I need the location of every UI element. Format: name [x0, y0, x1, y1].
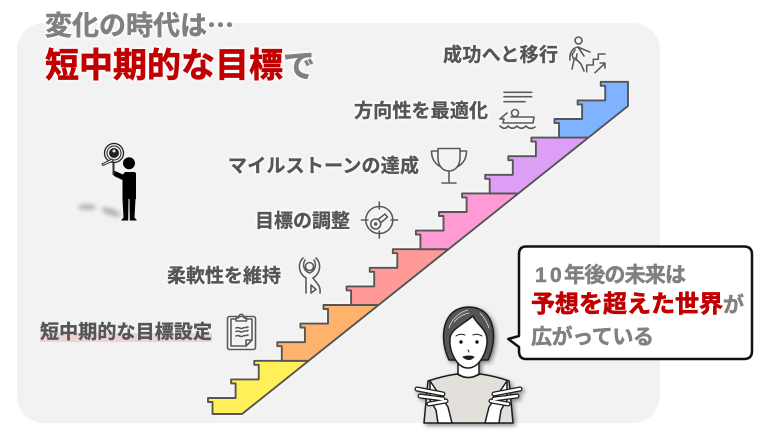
- icon: flexible person: [299, 258, 320, 293]
- staircase: [208, 82, 628, 414]
- stairs: purple: [485, 138, 588, 193]
- label: 方向性を最適化: 方向性を最適化: [354, 99, 488, 122]
- left hand: [417, 381, 452, 423]
- bubble line 1: 年後の未来は: [564, 264, 686, 287]
- neck: [458, 362, 479, 378]
- label: 短中期的な目標設定: 短中期的な目標設定: [40, 321, 212, 343]
- icon: trophy: [432, 148, 466, 183]
- icon: target with key: [362, 202, 398, 238]
- icon: clipboard: [228, 314, 256, 350]
- icon: swimmer and boat: [500, 92, 535, 128]
- speech bubble: [508, 246, 752, 359]
- stairs: yellow: [208, 361, 309, 414]
- title line 2: 短中期的な目標で: [45, 47, 315, 85]
- label: マイルストーンの達成: マイルストーンの達成: [228, 154, 419, 177]
- shadow: [78, 204, 122, 218]
- character: woman presenting: [417, 307, 520, 423]
- stairs: blue: [554, 82, 628, 138]
- silhouette: [112, 157, 137, 220]
- bubble shape: [508, 246, 752, 359]
- magnifier: [102, 144, 124, 175]
- label: 目標の調整: 目標の調整: [255, 210, 350, 232]
- title line 1: 変化の時代は…: [45, 4, 234, 43]
- torso: [424, 374, 513, 423]
- stairs: pink: [416, 193, 518, 249]
- stairs: red: [347, 249, 448, 305]
- hair strands: [449, 310, 489, 328]
- label: 柔軟性を維持: 柔軟性を維持: [167, 265, 281, 287]
- eyes and mouth: [456, 334, 482, 360]
- figure: man holding magnifier: [78, 144, 137, 220]
- highlight: label underline: [40, 333, 212, 342]
- hair back: [444, 307, 494, 360]
- bubble line 1: 10: [535, 264, 562, 287]
- face: [450, 316, 487, 368]
- label: 成功へと移行: 成功へと移行: [443, 43, 558, 66]
- stairs: orange: [277, 305, 379, 361]
- icon: walker climbing steps: [570, 37, 605, 73]
- panel: background: [17, 23, 660, 423]
- title: [45, 4, 315, 85]
- right hand: [485, 381, 520, 423]
- bubble line 2: 予想を超えた世界が: [531, 291, 744, 318]
- bubble line 3: 広がっている: [531, 325, 654, 349]
